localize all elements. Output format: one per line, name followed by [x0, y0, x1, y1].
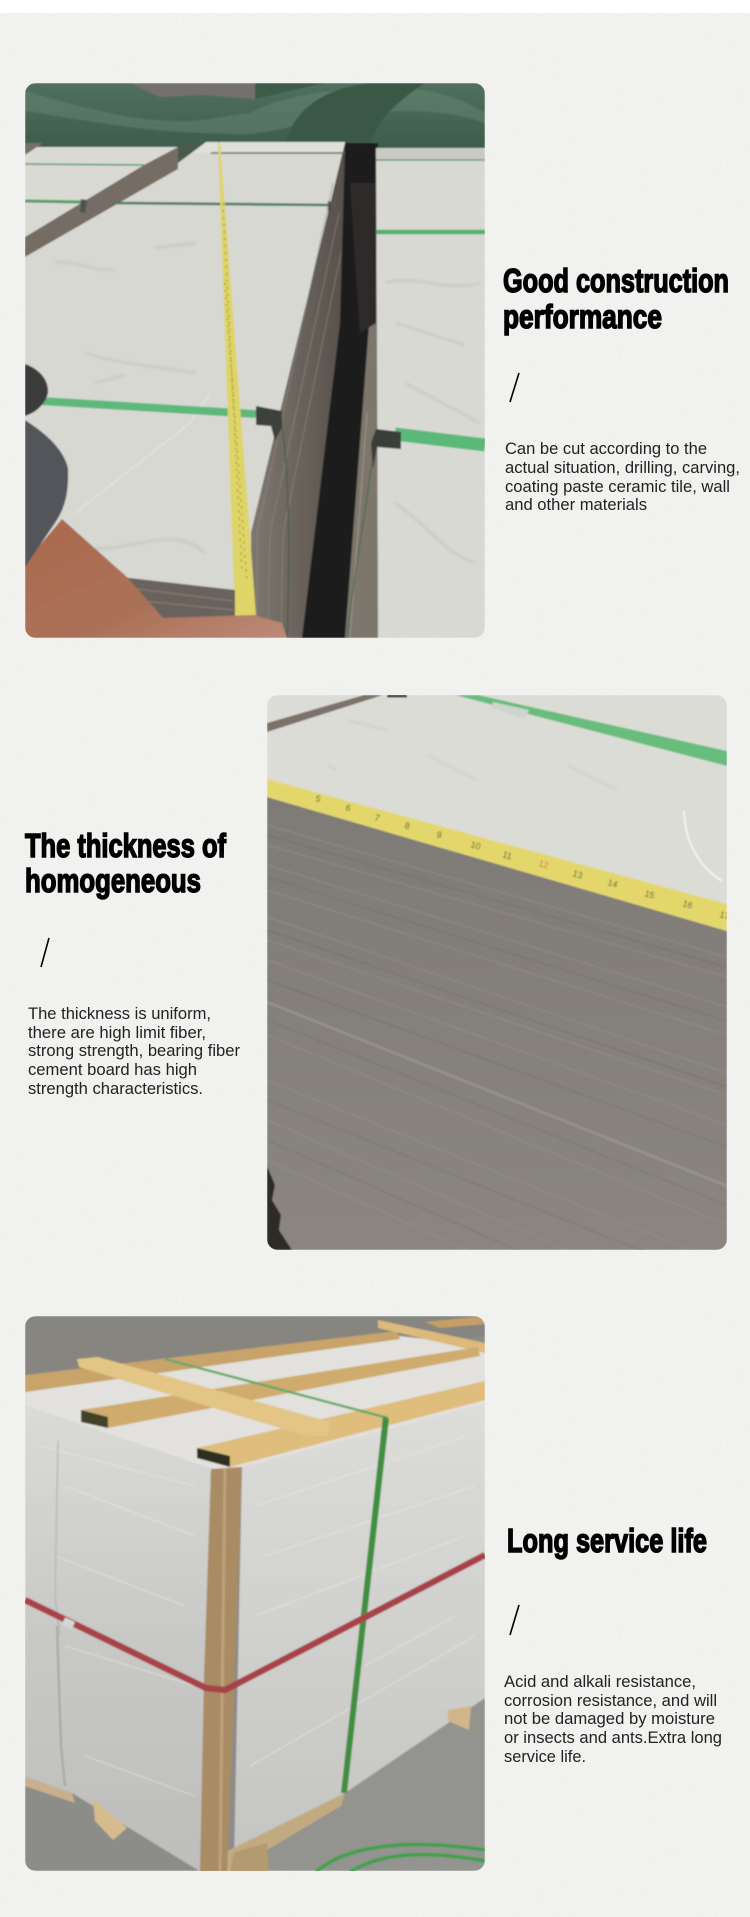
- photo: board edges with tape measure: 6: [344, 802, 352, 813]
- slash accent: [41, 938, 49, 967]
- body text: thickness: strong strength, bearing fiber: [28, 1041, 240, 1060]
- body text: service life: corrosion resistance, and will: [504, 1691, 717, 1710]
- body text: construction: [505, 439, 740, 514]
- body text: thickness: cement board has high: [28, 1060, 197, 1079]
- photo: board stacks measured with tape: [25, 83, 485, 638]
- board under arm: [121, 577, 235, 618]
- panel: the thickness of homogeneous: [25, 695, 731, 1285]
- panel: long service life: [25, 1316, 722, 1872]
- strap and clip: [455, 695, 727, 766]
- photo: board edges with tape measure: 14: [606, 877, 619, 890]
- photo: board edges with tape measure: 17: [718, 909, 731, 922]
- heading: thickness: homogeneous: [25, 862, 201, 899]
- board faces: [25, 1336, 485, 1469]
- stacked boards side: [267, 797, 727, 1250]
- body text: thickness: strength characteristics.: [28, 1079, 203, 1098]
- photo: board edges with tape measure: 13: [571, 868, 584, 881]
- panel: good construction performance: [25, 83, 740, 638]
- body text: thickness: The thickness is uniform,: [28, 1004, 211, 1023]
- body text: thickness: there are high limit fiber,: [28, 1023, 206, 1042]
- heading: good construction performance: performance: [503, 298, 662, 335]
- tape measure: [218, 142, 256, 617]
- strap clips: [256, 406, 282, 441]
- heading: thickness: The thickness of: [25, 827, 227, 864]
- feet: [93, 1799, 127, 1840]
- body text: service life: not be damaged by moisture: [504, 1709, 715, 1728]
- photo: board edges with tape measure: 16: [681, 898, 694, 911]
- body text: service life: Acid and alkali resistance,: [504, 1672, 696, 1691]
- photo: board edges with tape measure: 7: [373, 812, 381, 823]
- wooden planks: [25, 1331, 400, 1392]
- photo: wrapped pallet of boards: [25, 1316, 485, 1872]
- photo: board edges with tape measure: 10: [469, 839, 482, 852]
- photo: board edges with tape measure: 9: [435, 829, 443, 840]
- body text: construction: Can be cut according to the: [505, 439, 707, 458]
- strap lines: [25, 164, 144, 165]
- photo: board edges with tape measure: 11: [501, 849, 513, 861]
- body text: construction: and other materials: [505, 495, 647, 514]
- red strap: [25, 1555, 485, 1690]
- photo: board edges with tape measure: 15: [643, 888, 656, 901]
- photo: board edges with tape measure: 12: [537, 858, 550, 871]
- body text: construction: coating paste ceramic tile, wall: [505, 477, 730, 496]
- body text: service life: [504, 1672, 722, 1766]
- body text: service life: service life.: [504, 1747, 586, 1766]
- corner post: [200, 1467, 242, 1872]
- body text: construction: actual situation, drilling, carving,: [505, 458, 740, 477]
- photo: board edges with tape measure: [267, 695, 731, 1285]
- tape measure with numbers: [267, 779, 727, 931]
- arm: [25, 519, 287, 638]
- green hose: [316, 1845, 485, 1872]
- heading: thickness: [25, 827, 227, 899]
- body text: service life: or insects and ants.Extra long: [504, 1728, 722, 1747]
- slash accent: [510, 1605, 519, 1635]
- marble veins: [55, 243, 480, 563]
- green strap: [165, 1359, 388, 1418]
- heading: good construction performance: [503, 262, 729, 335]
- body text: thickness: [28, 1004, 240, 1098]
- slash accent: [510, 373, 519, 402]
- photo: board edges with tape measure: 8: [403, 820, 411, 831]
- photo: board edges with tape measure: 5: [314, 793, 322, 804]
